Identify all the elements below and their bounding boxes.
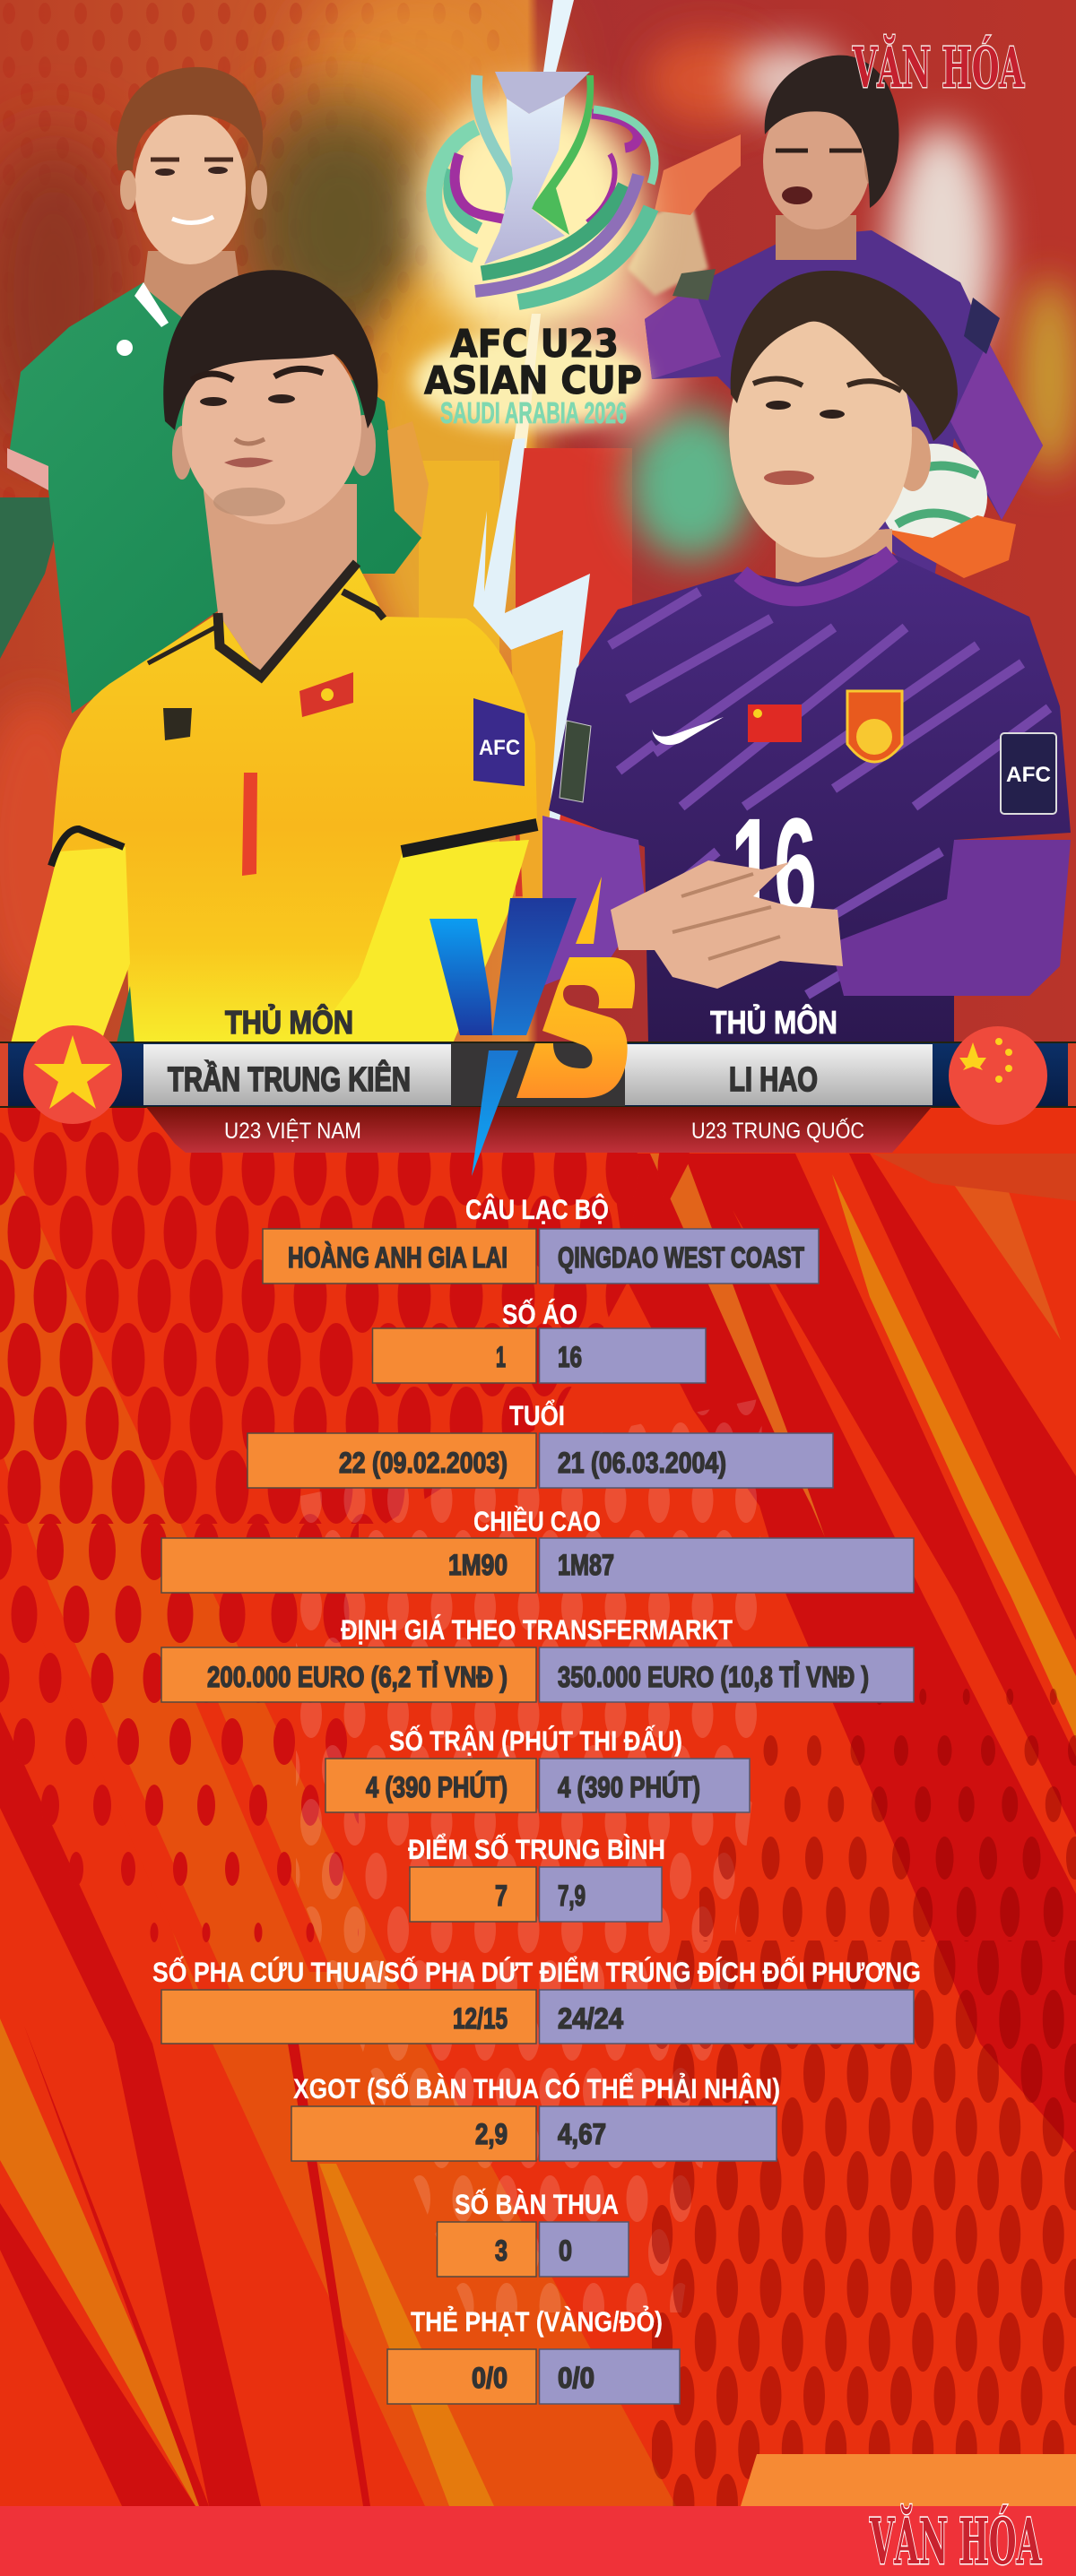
kit logo xyxy=(163,708,192,740)
right bar xyxy=(540,1229,819,1284)
right value: 21 (06.03.2004) xyxy=(558,1447,726,1479)
competition sleeve patch xyxy=(560,721,591,802)
row: cards xyxy=(387,2305,680,2404)
left bar xyxy=(438,2222,536,2277)
row: transfermarkt value xyxy=(161,1613,914,1702)
logo wordmark xyxy=(423,328,641,394)
right value: 0/0 xyxy=(558,2362,594,2394)
left value: 12/15 xyxy=(453,2002,508,2035)
hero photo composite xyxy=(0,0,1076,1043)
Vietnam flag on jersey xyxy=(299,672,353,717)
left team: U23 VIỆT NAM xyxy=(224,1118,361,1144)
row: matches and minutes xyxy=(325,1725,750,1812)
AFC patch: AFC xyxy=(479,736,520,760)
VS emblem xyxy=(430,877,635,1176)
label: ĐIỂM SỐ TRUNG BÌNH xyxy=(408,1833,665,1865)
left bar xyxy=(325,1759,536,1812)
AFC sleeve patch: AFC xyxy=(1006,763,1051,787)
China flag on jersey xyxy=(748,705,802,742)
icon: Vietnam flag circle xyxy=(23,1025,122,1124)
label: THẺ PHẠT (VÀNG/ĐỎ) xyxy=(411,2305,663,2338)
left bar xyxy=(161,1990,536,2044)
logo wordmark: AFC U23 xyxy=(450,322,619,367)
left bar xyxy=(387,2349,536,2404)
left value: 4 (390 PHÚT) xyxy=(366,1771,508,1803)
right name plate: LI HAO xyxy=(729,1061,818,1099)
left value: 2,9 xyxy=(475,2118,508,2150)
left value: 3 xyxy=(495,2235,508,2267)
left bar xyxy=(291,2106,536,2161)
hands and wrists xyxy=(611,860,843,989)
right bar xyxy=(540,2106,777,2161)
lightning bolt divider xyxy=(473,438,590,901)
left bar xyxy=(161,1538,536,1593)
right role label: THỦ MÔN xyxy=(710,1003,837,1041)
left value: 22 (09.02.2003) xyxy=(339,1447,508,1479)
right bar xyxy=(540,1867,662,1922)
tournament logo: AFC U23 Asian Cup xyxy=(412,0,655,448)
jersey number 1 xyxy=(242,773,257,876)
row: saves versus shots on target xyxy=(152,1956,921,2044)
label: TUỔI xyxy=(509,1399,565,1431)
background: red-orange diagonal stripes and halftone dots xyxy=(0,1043,1076,2576)
left name plate: TRẦN TRUNG KIÊN xyxy=(168,1059,411,1099)
label: XGOT (SỐ BÀN THUA CÓ THỂ PHẢI NHẬN) xyxy=(293,2072,780,2105)
label: SỐ PHA CỨU THUA/SỐ PHA DỨT ĐIỂM TRÚNG ĐÍCH ĐỐI PHƯƠNG xyxy=(152,1956,921,1988)
row: goals conceded xyxy=(438,2188,629,2277)
right value: QINGDAO WEST COAST xyxy=(558,1241,804,1274)
right bar xyxy=(540,1990,914,2044)
AFC sleeve patch xyxy=(1001,733,1056,814)
name band xyxy=(0,1042,1076,1108)
right bar xyxy=(540,1328,706,1383)
letter V xyxy=(430,898,577,1176)
right bar xyxy=(540,2222,629,2277)
left bar xyxy=(263,1229,536,1284)
icon: China flag circle xyxy=(949,1026,1047,1125)
back-left player in green jersey xyxy=(0,67,429,713)
collar xyxy=(741,554,892,596)
left name plate xyxy=(143,1044,451,1105)
center dark plate xyxy=(451,1043,625,1106)
right bar xyxy=(540,1433,833,1488)
logo wordmark: ASIAN CUP xyxy=(424,359,642,403)
right bar xyxy=(540,1759,750,1812)
right name plate xyxy=(625,1044,933,1105)
team subtitle plate xyxy=(146,1107,932,1153)
right bar xyxy=(540,2349,680,2404)
label: SỐ BÀN THUA xyxy=(455,2188,619,2220)
back-right player in purple jersey xyxy=(628,56,1043,592)
right value: 1M87 xyxy=(558,1549,614,1581)
left bar xyxy=(161,1647,536,1702)
left value: 1 xyxy=(496,1341,506,1373)
label: CÂU LẠC BỘ xyxy=(465,1193,609,1225)
right value: 4,67 xyxy=(558,2118,606,2150)
right value: 7,9 xyxy=(558,1880,586,1912)
row: shirt number xyxy=(373,1298,706,1383)
front-left player: Trần Trung Kiên in yellow jersey xyxy=(11,270,537,1043)
right value: 4 (390 PHÚT) xyxy=(558,1771,700,1803)
left value: 0/0 xyxy=(472,2362,508,2394)
row: age xyxy=(247,1399,833,1488)
logo subtitle: SAUDI ARABIA 2026 xyxy=(440,396,627,429)
label: SỐ ÁO xyxy=(502,1298,577,1330)
right value: 24/24 xyxy=(558,2002,623,2035)
footer: source tab and band xyxy=(0,2454,1076,2576)
left value: HOÀNG ANH GIA LAI xyxy=(288,1241,508,1274)
letter S xyxy=(516,877,635,1098)
left bar xyxy=(373,1328,536,1383)
left bar xyxy=(410,1867,536,1922)
left value: 1M90 xyxy=(448,1549,508,1581)
row: height xyxy=(161,1505,914,1593)
right value: 16 xyxy=(558,1341,582,1373)
row: club xyxy=(263,1193,819,1284)
right value: 350.000 EURO (10,8 TỈ VNĐ ) xyxy=(558,1661,869,1693)
right value: 0 xyxy=(559,2235,572,2267)
jersey number 16: 16 xyxy=(731,788,817,948)
left value: 200.000 EURO (6,2 TỈ VNĐ ) xyxy=(207,1661,508,1693)
right bar xyxy=(540,1647,914,1702)
Nike swoosh xyxy=(652,717,724,745)
label: CHIỀU CAO xyxy=(473,1505,601,1537)
left value: 7 xyxy=(495,1880,508,1912)
left role label: THỦ MÔN xyxy=(225,1003,353,1041)
AFC patch xyxy=(473,698,525,786)
front-right player: Li Hao in purple jersey xyxy=(542,271,1071,1043)
right team: U23 TRUNG QUỐC xyxy=(691,1117,864,1144)
right bar xyxy=(540,1538,914,1593)
left bar xyxy=(247,1433,536,1488)
CFA badge xyxy=(847,691,902,762)
label: ĐỊNH GIÁ THEO TRANSFERMARKT xyxy=(341,1613,733,1646)
label: SỐ TRẬN (PHÚT THI ĐẤU) xyxy=(389,1725,682,1757)
row: average rating xyxy=(408,1833,665,1922)
row: xGOT xyxy=(291,2072,780,2161)
